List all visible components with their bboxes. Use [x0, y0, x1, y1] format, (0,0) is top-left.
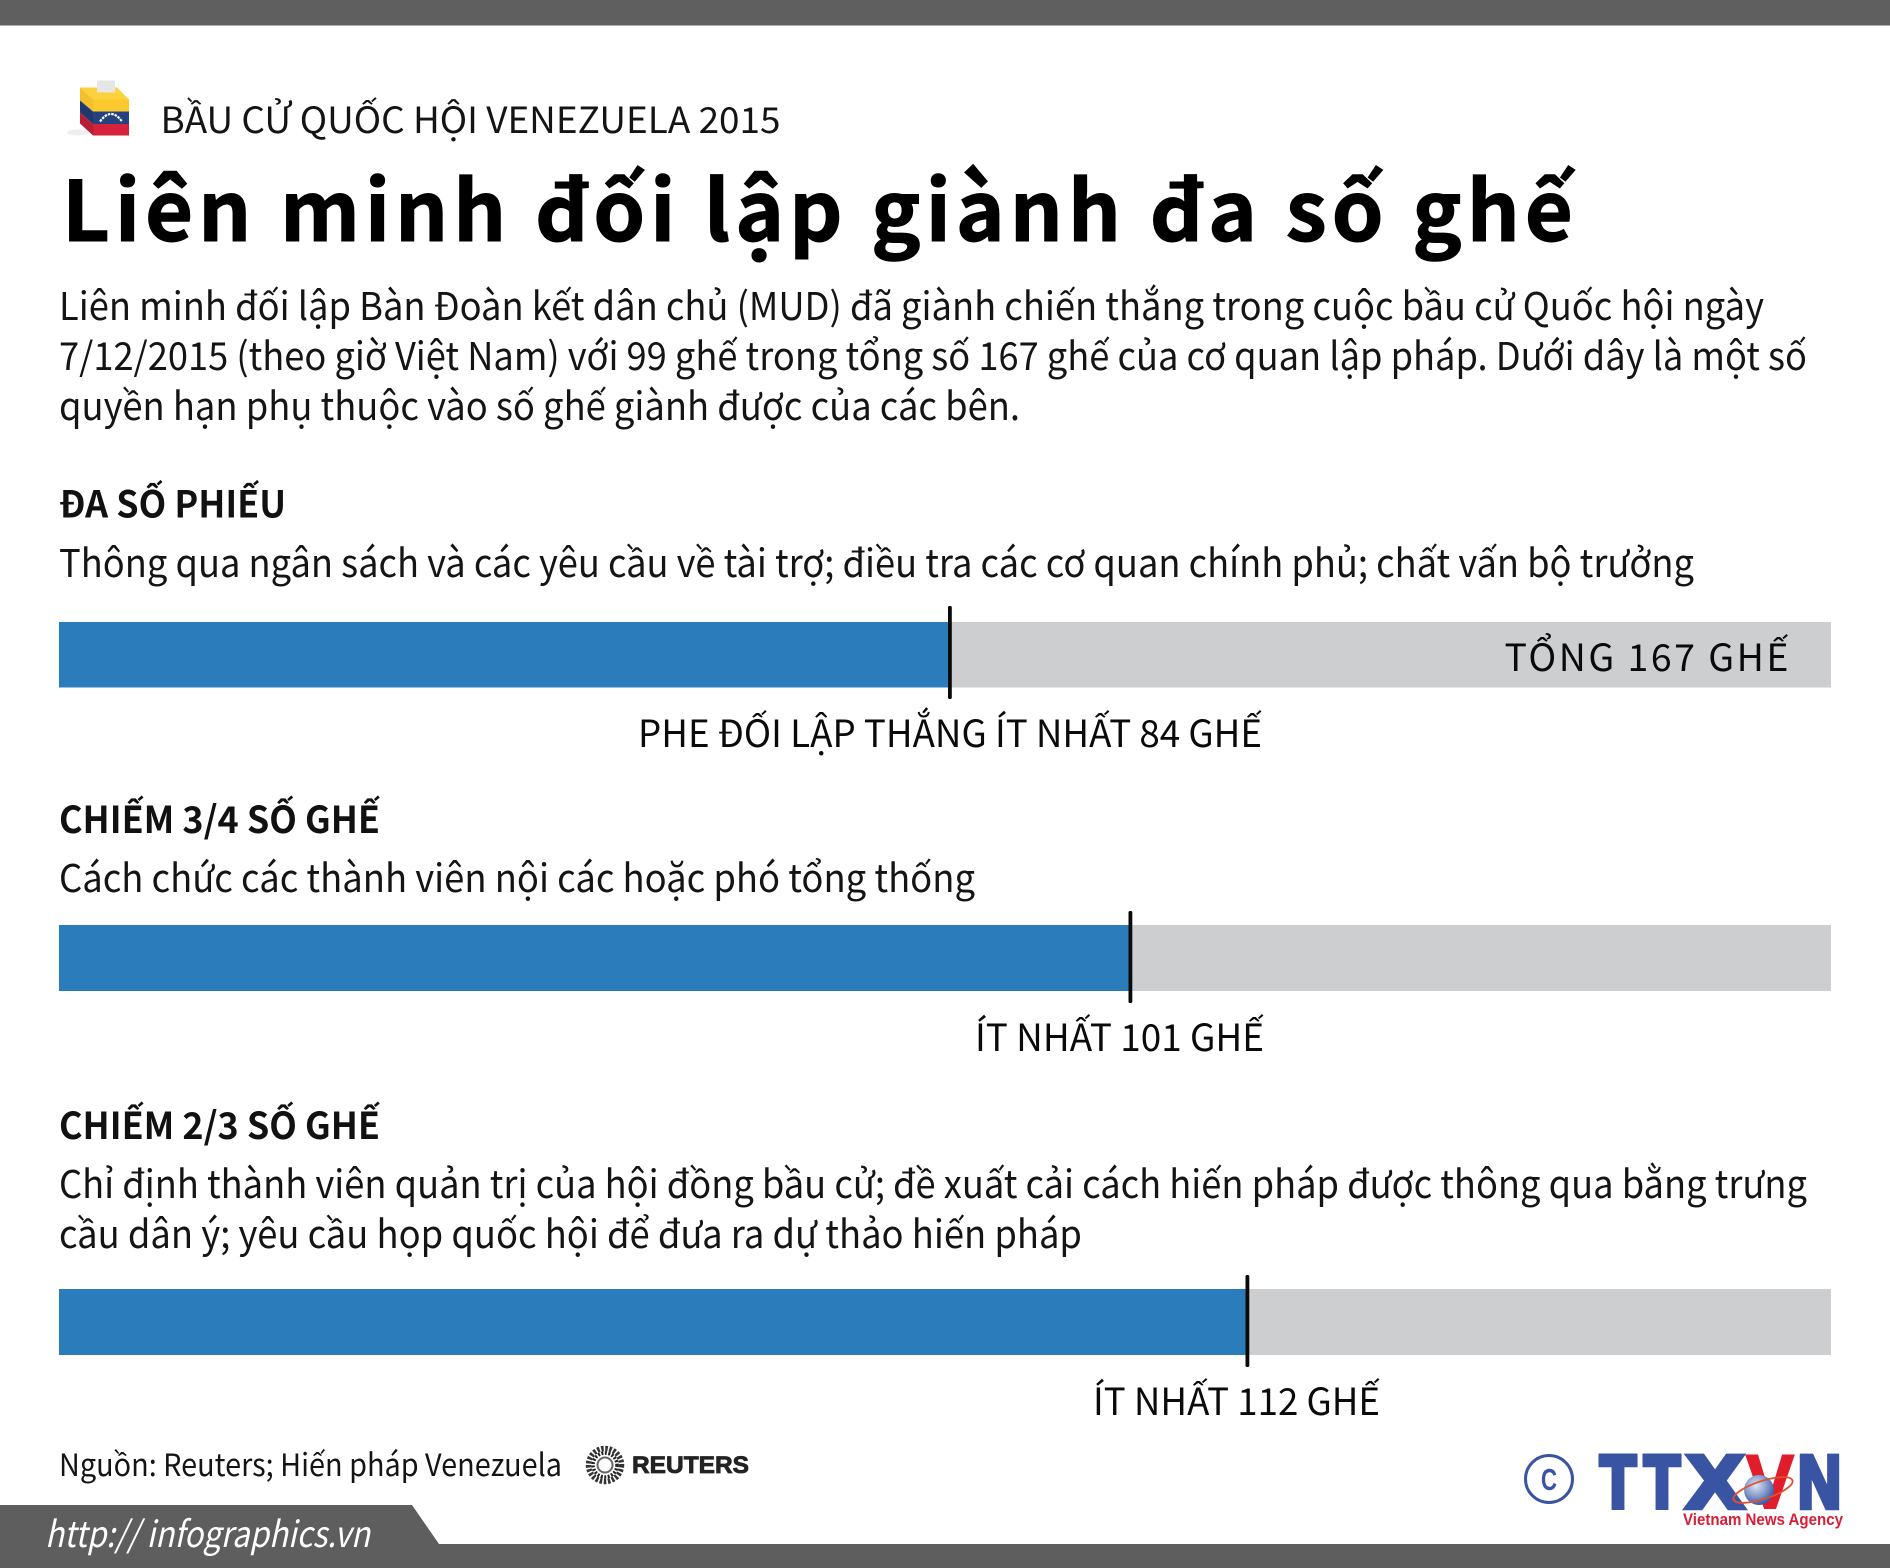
icon: Reuters logo: REUTERS	[632, 1452, 749, 1479]
threshold label: 84 seats: PHE ĐỐI LẬP THẮNG ÍT NHẤT 84 GHẾ	[638, 703, 1262, 758]
heading: three quarters: CHIẾM 3/4 SỐ GHẾ	[59, 790, 380, 844]
panel: three quarters majority	[59, 790, 1831, 1062]
logo: TTXVN: X	[1687, 1440, 1743, 1524]
logo: TTXVN	[1600, 1440, 1843, 1529]
bar chart: 101 of 167 seats	[59, 911, 1831, 1003]
logo: TTXVN: V	[1746, 1440, 1794, 1525]
top bar	[0, 0, 1890, 26]
intro text block: 7/12/2015 (theo giờ Việt Nam) với 99 ghế trong tổng số 167 ghế của cơ quan lập pháp. Dưới dây là một số	[59, 326, 1807, 382]
description: two thirds: Chỉ định thành viên quản trị của hội đồng bầu cử; đề xuất cải cách hiến pháp được thông qua bằng trưng	[59, 1154, 1807, 1210]
icon: ballot box in Venezuelan flag colours	[67, 80, 129, 136]
bar chart: 84 of 167 seats	[59, 606, 1831, 699]
source note: Nguồn: Reuters; Hiến pháp Venezuela	[59, 1440, 562, 1485]
panel: two thirds majority	[59, 1096, 1831, 1426]
intro text block: Liên minh đối lập Bàn Đoàn kết dân chủ (MUD) đã giành chiến thắng trong cuộc bầu cử Quốc hội ngày	[59, 276, 1764, 332]
intro text block: quyền hạn phụ thuộc vào số ghế giành được của các bên.	[59, 376, 1020, 432]
title: Liên minh đối lập giành đa số ghế	[62, 145, 1576, 265]
description: simple majority: Thông qua ngân sách và các yêu cầu về tài trợ; điều tra các cơ quan chính phủ; chất vấn bộ trưởng	[59, 533, 1694, 589]
icon: copyright: C	[1541, 1462, 1557, 1497]
bottom bar with URL tab	[0, 1505, 1890, 1568]
subtitle: BẦU CỬ QUỐC HỘI VENEZUELA 2015	[160, 92, 780, 144]
logo: TTXVN: T	[1644, 1440, 1680, 1524]
heading: two thirds: CHIẾM 2/3 SỐ GHẾ	[59, 1096, 380, 1150]
logo: TTXVN: T	[1600, 1440, 1636, 1524]
description: two thirds	[59, 1154, 1807, 1260]
intro text block	[59, 276, 1807, 432]
icon: copyright	[1526, 1456, 1572, 1502]
heading: simple majority: ĐA SỐ PHIẾU	[59, 474, 286, 528]
total seats label: TỔNG 167 GHẾ	[1504, 627, 1788, 682]
icon: Reuters logo	[588, 1448, 749, 1482]
agency name: Vietnam News Agency	[1683, 1510, 1843, 1529]
description: two thirds: cầu dân ý; yêu cầu họp quốc hội để đưa ra dự thảo hiến pháp	[59, 1204, 1082, 1260]
threshold label: 101 seats: ÍT NHẤT 101 GHẾ	[975, 1007, 1264, 1062]
panel: simple majority	[59, 474, 1831, 758]
description: three quarters: Cách chức các thành viên nội các hoặc phó tổng thống	[59, 848, 975, 904]
logo: TTXVN: N	[1798, 1440, 1841, 1524]
url: http:// infographics.vn	[45, 1506, 372, 1558]
bar chart: 112 of 167 seats	[59, 1275, 1831, 1367]
threshold label: 112 seats: ÍT NHẤT 112 GHẾ	[1093, 1371, 1380, 1426]
